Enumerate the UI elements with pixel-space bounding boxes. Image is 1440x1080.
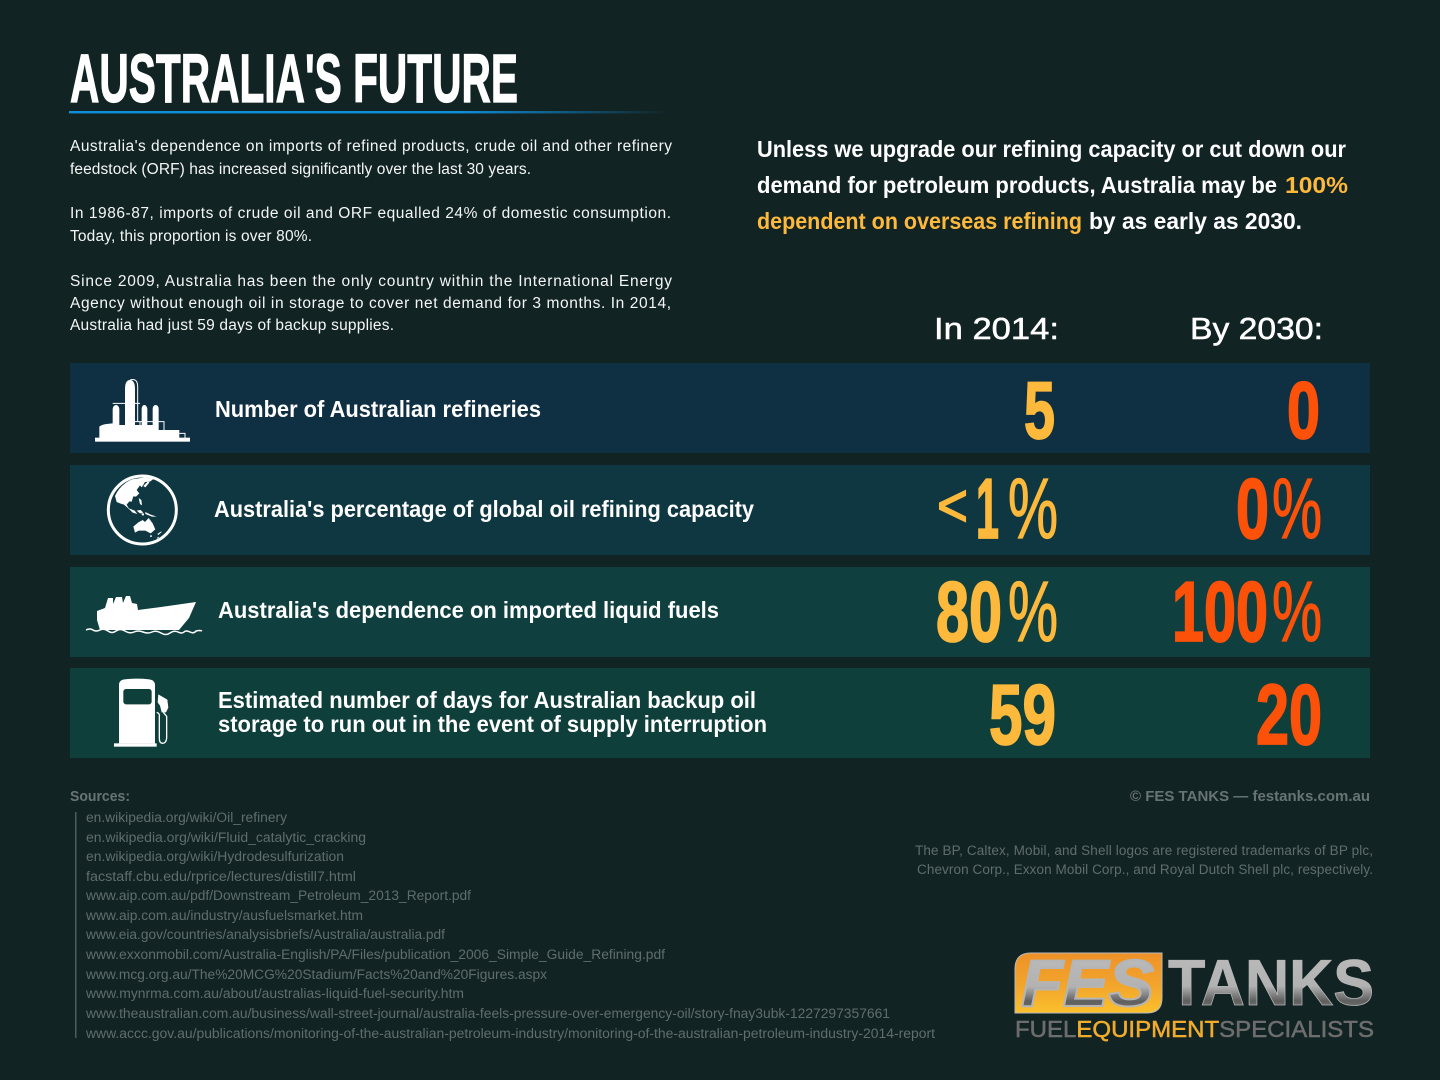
intro text block — [70, 138, 672, 334]
sources list: en.wikipedia.org/wiki/Hydrodesulfurization — [86, 849, 344, 864]
panel: backup storage row: 20 — [1256, 668, 1322, 763]
key message callout — [757, 136, 1348, 234]
sources list: www.accc.gov.au/publications/monitoring-of-the-australian-petroleum-industry/monitoring-of-the-australian-petroleum-industry-2014-report — [85, 1026, 935, 1041]
sources list: en.wikipedia.org/wiki/Fluid_catalytic_cracking — [86, 830, 366, 845]
column heading: In 2014: In 2014: — [934, 311, 1059, 346]
sources list — [75, 810, 935, 1041]
key message callout: demand for petroleum products, Australia may be — [757, 172, 1277, 198]
logo: FES Tanks: FES — [1021, 946, 1154, 1020]
panel: global capacity row: 0 — [1236, 462, 1269, 557]
sources heading: Sources: — [70, 788, 130, 805]
trademark note: Chevron Corp., Exxon Mobil Corp., and Royal Dutch Shell plc, respectively. — [917, 862, 1373, 877]
panel: refineries row: 0 — [1287, 366, 1320, 456]
key message callout: Unless we upgrade our refining capacity or cut down our — [757, 136, 1346, 162]
intro text block: In 1986-87, imports of crude oil and ORF equalled 24% of domestic consumption. — [70, 205, 671, 222]
column heading: By 2030: By 2030: — [1190, 311, 1323, 346]
panel: imported fuel row: 100 — [1172, 565, 1268, 660]
panel: global capacity row: Australia's percentage of global oil refining capacity — [214, 496, 754, 522]
panel: global capacity row: % — [1008, 462, 1058, 557]
panel: global capacity row: % — [1272, 462, 1322, 557]
sources list: www.eia.gov/countries/analysisbriefs/Australia/australia.pdf — [85, 927, 445, 942]
sources list: www.theaustralian.com.au/business/wall-street-journal/australia-feels-pressure-over-emergency-oil/story-fnay3ubk-1227297357661 — [85, 1006, 890, 1021]
key message callout: by as early as 2030. — [1089, 208, 1302, 234]
panel: refineries row — [70, 363, 1370, 456]
trademark note: The BP, Caltex, Mobil, and Shell logos are registered trademarks of BP plc, — [915, 843, 1373, 858]
panel: global capacity row — [70, 462, 1370, 557]
copyright: © FES TANKS — festanks.com.au — [1130, 788, 1370, 805]
panel: imported fuel row: Australia's dependence on imported liquid fuels — [218, 597, 719, 623]
intro text block: Since 2009, Australia has been the only country within the International Energy — [70, 273, 672, 290]
intro text block: Today, this proportion is over 80%. — [70, 228, 312, 245]
panel: refineries row: Number of Australian refineries — [215, 396, 541, 422]
sources list: www.exxonmobil.com/Australia-English/PA/Files/publication_2006_Simple_Guide_Refining.pdf — [85, 947, 665, 962]
icon: refinery — [95, 380, 190, 442]
panel: backup storage row: 59 — [989, 668, 1056, 763]
trademark note — [915, 843, 1373, 877]
icon: ship — [86, 596, 202, 634]
sources list: www.aip.com.au/pdf/Downstream_Petroleum_2013_Report.pdf — [85, 888, 471, 903]
intro text block: Australia's dependence on imports of refined products, crude oil and other refinery — [70, 138, 672, 155]
logo: FES Tanks: FUELEQUIPMENT SPECIALISTS — [1015, 1016, 1374, 1042]
intro text block: feedstock (ORF) has increased significantly over the last 30 years. — [70, 161, 531, 178]
panel: refineries row: 5 — [1024, 366, 1055, 456]
panel: imported fuel row: 80 — [936, 565, 1002, 660]
intro text block: Australia had just 59 days of backup supplies. — [70, 317, 394, 334]
icon: fuel pump — [114, 679, 168, 747]
sources list: en.wikipedia.org/wiki/Oil_refinery — [86, 810, 287, 825]
panel: backup storage row: Estimated number of days for Australian backup oil — [218, 687, 756, 713]
panel: imported fuel row: % — [1272, 565, 1322, 660]
panel: imported fuel row: % — [1008, 565, 1058, 660]
icon: globe — [108, 476, 176, 544]
key message callout: 100% — [1285, 172, 1348, 198]
title: AUSTRALIA'S FUTURE — [70, 40, 518, 117]
sources list: www.mynrma.com.au/about/australias-liquid-fuel-security.htm — [85, 986, 464, 1001]
sources list: www.mcg.org.au/The%20MCG%20Stadium/Facts%20and%20Figures.aspx — [85, 967, 547, 982]
panel: backup storage row: storage to run out in the event of supply interruption — [218, 711, 767, 737]
panel: global capacity row: 1 — [976, 462, 999, 557]
panel: global capacity row: < — [937, 472, 968, 539]
key message callout: dependent on overseas refining — [757, 208, 1082, 234]
sources list: www.aip.com.au/industry/ausfuelsmarket.htm — [85, 908, 363, 923]
logo: FES Tanks: TANKS — [1168, 946, 1374, 1019]
intro text block: Agency without enough oil in storage to cover net demand for 3 months. In 2014, — [70, 295, 671, 312]
sources list: facstaff.cbu.edu/rprice/lectures/distill7.html — [86, 869, 356, 884]
panel: imported fuel row — [70, 565, 1370, 660]
panel: backup storage row — [70, 668, 1370, 763]
logo: FES Tanks — [1015, 946, 1374, 1042]
